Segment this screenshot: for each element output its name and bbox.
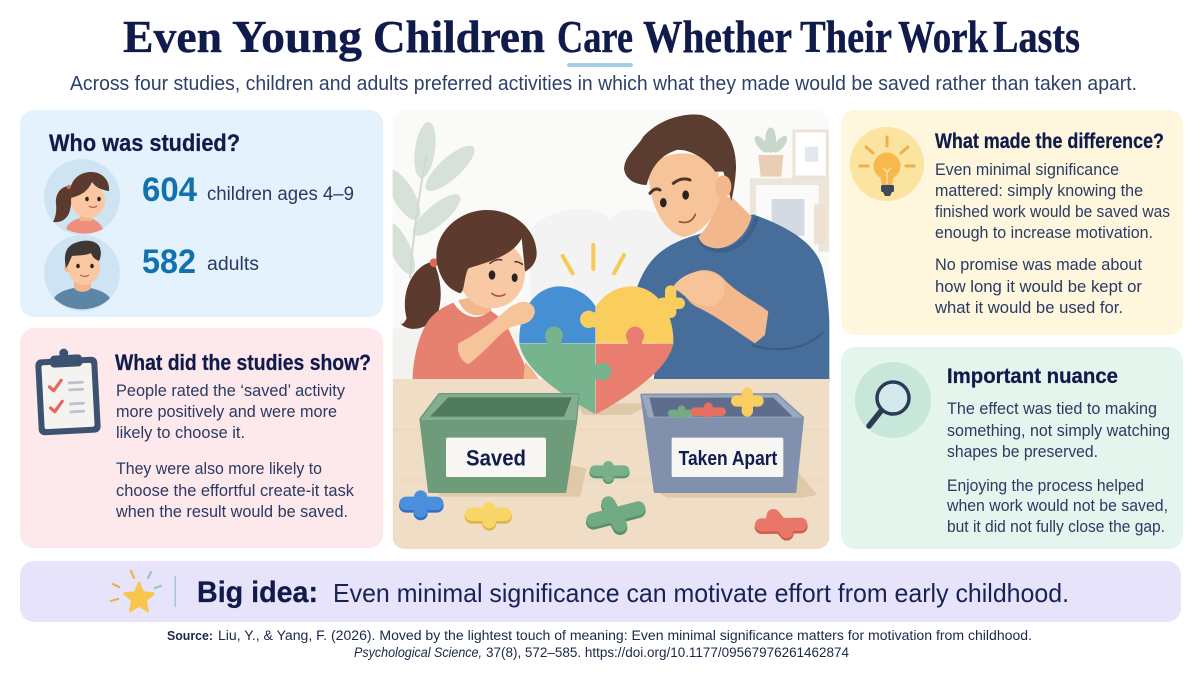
panel: what made the difference: [841, 110, 1183, 335]
text: studies findings: likely to choose it.: [116, 423, 245, 442]
heading: what made the difference: What made the difference?: [935, 130, 1164, 153]
table: [393, 379, 829, 549]
icon: light bulb: [850, 127, 924, 201]
source citation: 37(8), 572–585. https://doi.org/10.1177/09567976261462874: [486, 645, 849, 660]
subtitle: Across four studies, children and adults preferred activities in which what they made would be saved rather than taken apart.: [70, 73, 1137, 95]
girl: [400, 210, 540, 382]
heading: important nuance: Important nuance: [947, 365, 1118, 388]
text: nuance details: [946, 399, 1170, 536]
heart puzzle: [519, 286, 673, 414]
text: studies findings: choose the effortful create-it task: [116, 481, 354, 500]
text: minimal significance: how long it would be kept or: [935, 277, 1142, 296]
text: studies findings: [115, 381, 354, 521]
panel: illustration: [379, 110, 830, 549]
stat: 604 children: 604: [142, 171, 197, 209]
title: Young: [232, 12, 363, 62]
background leaves: [392, 122, 474, 278]
panel: what did the studies show: [20, 328, 383, 548]
stat: 582 adults: adults: [207, 254, 259, 275]
source citation: Liu, Y., & Yang, F. (2026). Moved by the lightest touch of meaning: Even minimal significance matters for motivation from childhood.: [218, 628, 1032, 643]
heading: who was studied: Who was studied?: [49, 130, 240, 157]
stat: 604 children: [142, 171, 354, 209]
panel: important nuance: [841, 347, 1183, 549]
stat: 604 children: children ages 4–9: [207, 184, 354, 205]
text: studies findings: People rated the ‘saved’ activity: [116, 381, 345, 400]
icon: magnifying glass: [855, 362, 931, 438]
man: [624, 115, 830, 382]
text: nuance details: Enjoying the process helped: [947, 476, 1144, 495]
text: studies findings: more positively and were more: [116, 402, 337, 421]
big idea text: Big idea:: [197, 576, 318, 609]
icon: star: [111, 571, 161, 611]
heading: what did the studies show: What did the studies show?: [115, 350, 371, 375]
background shelf: [750, 127, 829, 252]
text: minimal significance: finished work would be saved was: [935, 202, 1170, 221]
text: nuance details: something, not simply watching: [947, 421, 1170, 440]
title: Whether: [643, 12, 792, 62]
panel: big idea: [20, 561, 1181, 622]
text: nuance details: when work would not be saved,: [946, 496, 1168, 515]
box: taken apart: Taken Apart: [679, 448, 778, 470]
box: taken apart: [642, 393, 803, 492]
loose puzzle pieces: [406, 466, 801, 534]
text: minimal significance: [934, 160, 1170, 317]
source citation: [167, 628, 1032, 660]
text: studies findings: They were also more likely to: [116, 459, 322, 478]
text: nuance details: but it did not fully close the gap.: [947, 517, 1165, 536]
text: minimal significance: Even minimal significance: [935, 160, 1119, 179]
title: [123, 12, 1080, 67]
text: minimal significance: enough to increase motivation.: [935, 223, 1153, 242]
text: nuance details: shapes be preserved.: [947, 442, 1098, 461]
text: minimal significance: No promise was made about: [935, 255, 1142, 274]
title: Their: [800, 12, 892, 62]
box: saved: [421, 394, 578, 492]
text: minimal significance: mattered: simply knowing the: [935, 181, 1143, 200]
icon: adult avatar: [44, 235, 120, 311]
title: Even: [123, 12, 222, 62]
title: Care: [557, 12, 633, 62]
text: minimal significance: what it would be used for.: [934, 298, 1123, 317]
title: Children: [373, 12, 545, 62]
icon: child avatar: [44, 159, 120, 235]
stat: 582 adults: [142, 243, 259, 281]
pieces inside box: [672, 393, 758, 415]
icon: clipboard: [35, 347, 101, 436]
girl hand: [514, 302, 535, 325]
text: nuance details: The effect was tied to making: [947, 399, 1157, 418]
text: studies findings: when the result would be saved.: [115, 502, 348, 521]
big idea text: Even minimal significance can motivate effort from early childhood.: [333, 578, 1069, 608]
man hand and piece: [663, 272, 724, 312]
box: saved: Saved: [466, 446, 526, 471]
stat: 582 adults: 582: [142, 243, 196, 281]
source citation: Psychological Science,: [354, 645, 482, 660]
panel: who was studied: [20, 110, 383, 317]
title: Work: [898, 12, 988, 62]
sparkle lines: [563, 245, 624, 273]
source citation: Source:: [167, 628, 213, 643]
title: Lasts: [993, 12, 1080, 62]
